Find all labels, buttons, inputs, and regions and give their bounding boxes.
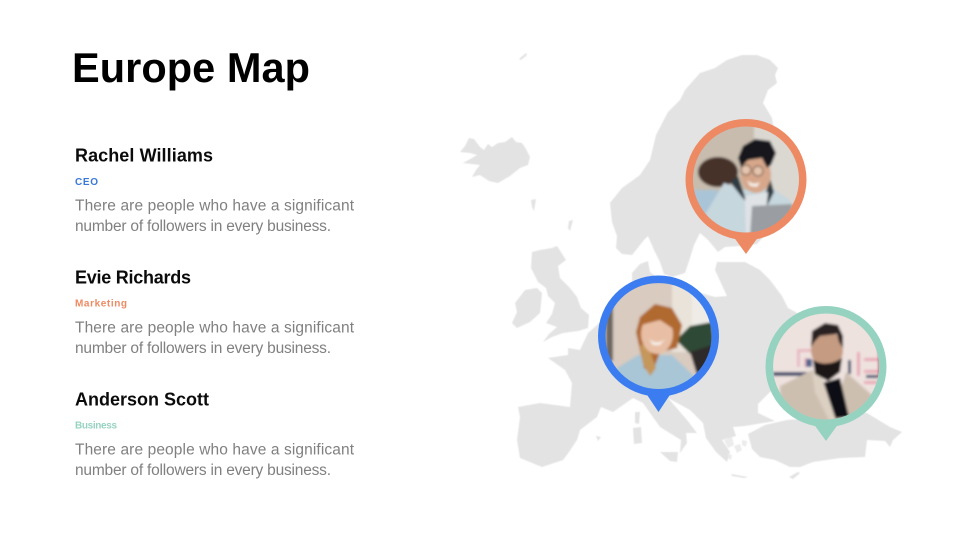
photo: person with glasses and laptop bbox=[693, 126, 799, 232]
Iceland bbox=[460, 137, 530, 183]
profile: Rachel Williams: Rachel Williams bbox=[75, 146, 213, 166]
photo: smiling woman with red hair bbox=[604, 282, 714, 392]
profile: Anderson Scott bbox=[75, 390, 355, 479]
Turkey bbox=[748, 412, 902, 467]
Mediterranean islands bbox=[596, 412, 748, 478]
profile: Anderson Scott: Business bbox=[75, 420, 117, 432]
Svalbard fragment bbox=[519, 53, 527, 60]
title: Europe Map bbox=[72, 44, 310, 91]
profile: Rachel Williams: CEO bbox=[75, 177, 98, 188]
profile: Evie Richards: Evie Richards bbox=[75, 268, 191, 288]
profile: Evie Richards: There are people who have a significant bbox=[75, 320, 355, 336]
Scotland and Great Britain bbox=[531, 246, 589, 342]
profile: Anderson Scott: Anderson Scott bbox=[75, 390, 209, 410]
profile: Evie Richards bbox=[75, 268, 355, 357]
Cyprus and Crete bbox=[789, 472, 800, 479]
profile: Anderson Scott: There are people who have a significant bbox=[75, 442, 355, 458]
map pin: blue with photo of Evie bbox=[598, 276, 719, 412]
profile: Anderson Scott: number of followers in every business. bbox=[75, 462, 331, 479]
Mainland Europe bbox=[517, 261, 820, 467]
map pin: teal with photo of Anderson bbox=[766, 306, 886, 441]
profile: Evie Richards: number of followers in every business. bbox=[75, 340, 331, 357]
profile: Rachel Williams: number of followers in every business. bbox=[75, 218, 331, 235]
coast specks bbox=[724, 437, 747, 460]
photo: bearded man in beige blazer bbox=[773, 314, 879, 420]
Scandinavia bbox=[610, 55, 790, 277]
Ireland bbox=[512, 288, 542, 328]
profile: Rachel Williams bbox=[75, 146, 355, 235]
profile: Evie Richards: Marketing bbox=[75, 298, 127, 310]
map of Europe bbox=[460, 53, 902, 479]
profile: Rachel Williams: There are people who have a significant bbox=[75, 198, 355, 214]
Faroe and Shetland islands bbox=[531, 199, 573, 231]
profile list bbox=[75, 146, 355, 479]
map pin: orange with photo of Rachel bbox=[686, 119, 806, 254]
